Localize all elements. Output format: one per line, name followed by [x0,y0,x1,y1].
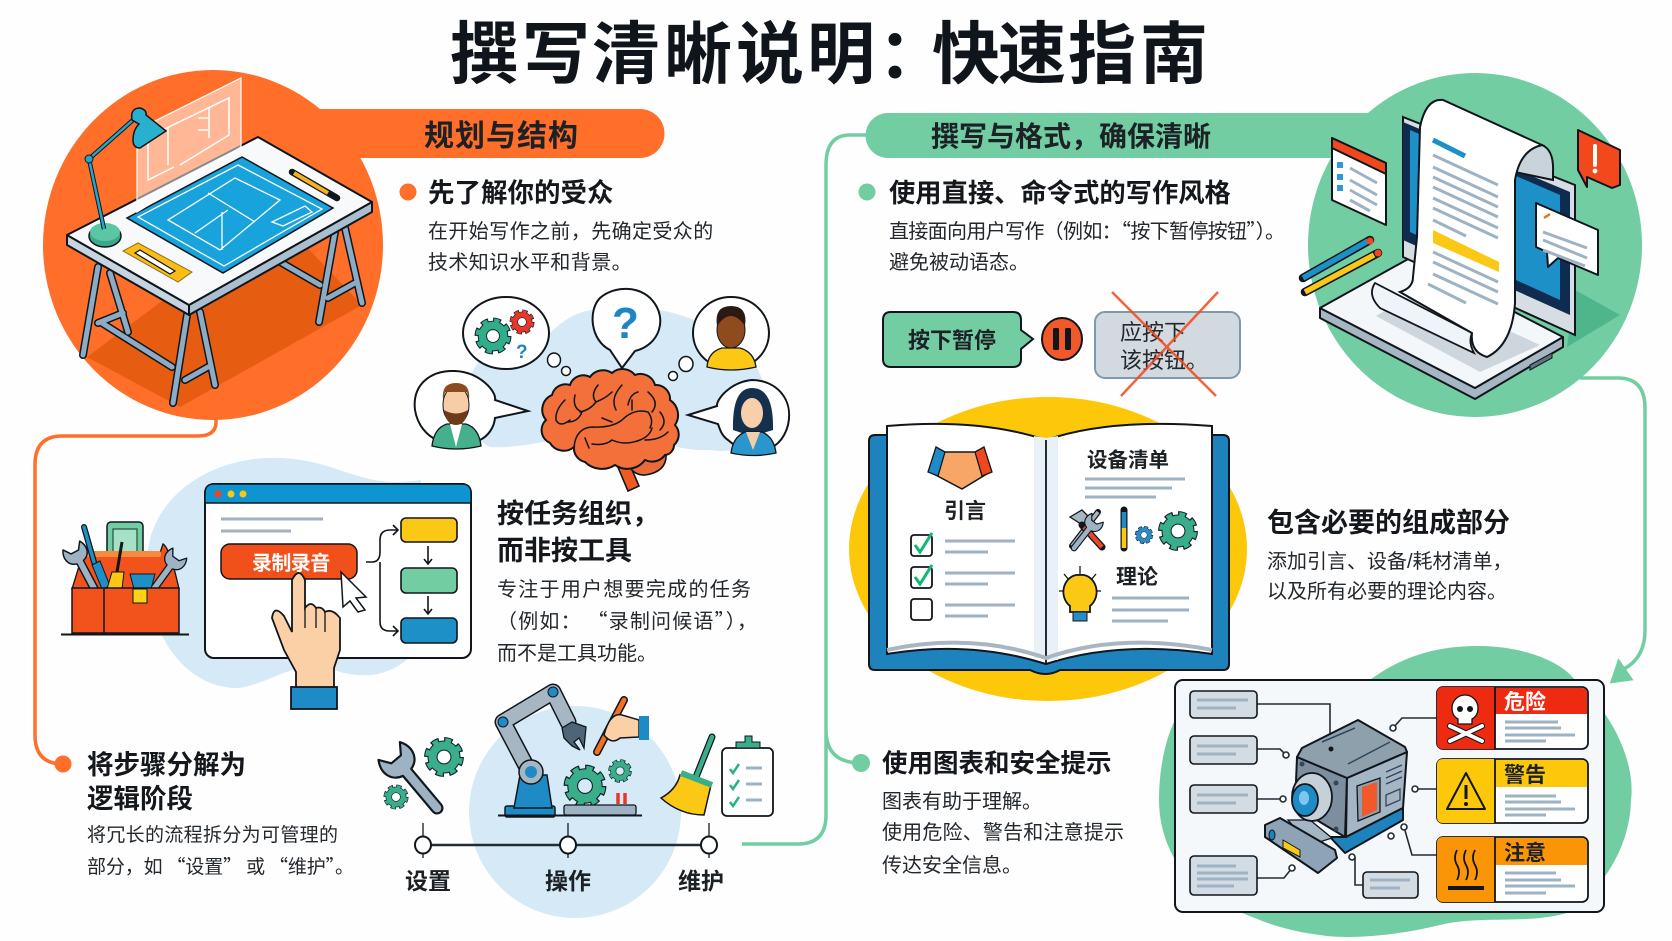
bullet [54,756,72,772]
blue circle [469,706,681,918]
blueprint [127,157,333,273]
cloud background [465,310,768,451]
section: required components: 以及所有必要的理论内容。 [1267,580,1507,603]
warning card: warning: 警告 [1504,764,1546,787]
body text: 图表有助于理解。 [882,790,1042,813]
heading: 按任务组织， [497,499,659,529]
citation label: 引言 [944,500,986,523]
machine [1265,720,1407,873]
brain [542,369,679,491]
desk lamp [85,108,166,247]
example: bad passive wording: 该按钮。 [1120,348,1208,373]
thought bubbles [548,353,693,380]
yellow circle backdrop [849,397,1247,701]
timeline labels [405,868,724,894]
timeline [405,823,724,894]
body text: 添加引言、设备/耗材清单， [1267,550,1513,573]
bubble: man top right [693,297,769,370]
laptop base [1320,258,1563,399]
banner heading: 撰写与格式，确保清晰 [931,121,1211,152]
section: direct imperative style [858,178,1285,274]
green circle [1308,73,1642,417]
cursor [341,572,366,612]
pages [887,424,1212,664]
hologram plan [137,78,241,212]
bubble: question mark: ? [612,299,639,348]
desk top [67,137,372,315]
checklist [911,533,1015,620]
banner heading: 规划与结构 [424,120,579,153]
pencils [1303,238,1382,292]
title: 撰写清晰说明：快速指南 [450,17,1208,93]
section: break into phases [54,750,354,879]
section: organise by task: （例如： “录制问候语”）， [497,605,757,634]
heading: 先了解你的受众 [428,178,614,208]
clipboard [722,736,773,816]
section: break into phases: 部分，如 “设置” 或 “维护”。 [87,852,354,879]
warning card: caution [1437,837,1588,902]
desk legs [83,228,362,403]
pointing hand [272,573,340,709]
banner bar [866,113,1380,158]
timeline labels: 设置 [405,868,451,894]
illustration: open book [869,424,1229,674]
warning card: danger: 危险 [1504,690,1546,714]
browser window [205,484,471,658]
icons: tools [1065,510,1194,556]
orange circle [43,70,383,420]
example: bad passive wording [1095,292,1240,396]
section: required components [1267,508,1513,603]
theory label: 理论 [1116,566,1158,589]
laptop screen [1403,117,1575,335]
bullet [852,754,870,772]
bubble: question mark [593,289,660,368]
heading: 使用直接、命令式的写作风格 [889,178,1231,208]
bubble: gears and question: ? [516,342,528,363]
heading: 使用图表和安全提示 [882,750,1112,778]
banner bar [310,109,664,158]
toolbox [61,522,189,634]
icon: alert bubble [1578,130,1620,188]
heading: 将步骤分解为 [87,750,246,780]
connector: green flow line left [742,135,866,844]
illustration: drafting desk [67,78,372,407]
bullet [858,184,876,200]
body text: 直接面向用户写作（例如：“按下暂停按钮”）。 [889,215,1285,244]
section: break into phases: 逻辑阶段 [87,784,193,814]
record button [221,544,357,579]
card: chat bubble [1536,203,1598,275]
section: organise by task: 而非按工具 [497,536,632,566]
heading: 包含必要的组成部分 [1267,508,1510,538]
example: bad passive wording: 应按下 [1120,320,1186,345]
setup tools [376,740,460,824]
broom [661,737,712,815]
equipment list label: 设备清单 [1087,449,1169,472]
body text: 将冗长的流程拆分为可管理的 [87,824,338,846]
gears and workbench [564,762,636,815]
timeline labels: 维护 [678,868,724,894]
warning card: danger [1437,687,1588,749]
icon: light bulb [1059,566,1101,621]
body text: 专注于用户想要完成的任务 [497,578,751,601]
warning card: warning [1437,759,1588,823]
flow chart [366,518,457,643]
illustration: task-based interface [61,458,471,709]
leader lines [1257,704,1437,885]
label boxes [1190,691,1418,898]
scroll paper [1372,100,1553,357]
illustration: audience and brain [415,289,789,491]
body text: 在开始写作之前，先确定受众的 [428,220,714,243]
section: organise by task: 而不是工具功能。 [497,642,657,665]
example: good button [883,312,1033,367]
card: browser window [1332,138,1386,225]
illustration: laptop with scroll [1303,100,1620,399]
panel: labelled equipment diagram [1175,680,1604,912]
section: know your audience: 技术知识水平和背景。 [428,251,632,274]
blue blob [147,458,425,688]
green blob backdrop [1159,646,1632,937]
section: diagrams and safety: 传达安全信息。 [882,854,1022,877]
warning card: caution: 注意 [1504,841,1546,865]
icon: pause button [1042,318,1082,360]
icon: handshake [928,447,992,489]
robot arm [498,687,642,817]
ruler [123,243,192,282]
bubble: woman [688,380,789,456]
example: good button: 按下暂停 [908,328,996,353]
record button: 录制录音 [252,551,330,575]
panel: planning banner [43,70,664,420]
bullet [400,184,416,200]
connector: green arrow to safety diagram [1580,378,1645,684]
timeline labels: 操作 [545,868,591,894]
section: diagrams and safety [852,750,1124,877]
section: direct imperative style: 避免被动语态。 [889,251,1029,274]
illustration: phases timeline [376,687,773,918]
pencil [292,172,337,198]
panel: writing and formatting banner [866,73,1642,417]
section: organise by task [497,499,757,665]
connector: orange flow line [35,419,216,764]
section: diagrams and safety: 使用危险、警告和注意提示 [882,821,1124,844]
bubble: gears and question [463,297,549,369]
section: know your audience [400,178,714,274]
hand with pen [597,700,649,752]
book cover [869,435,1229,674]
bubble: bearded man [415,371,528,449]
